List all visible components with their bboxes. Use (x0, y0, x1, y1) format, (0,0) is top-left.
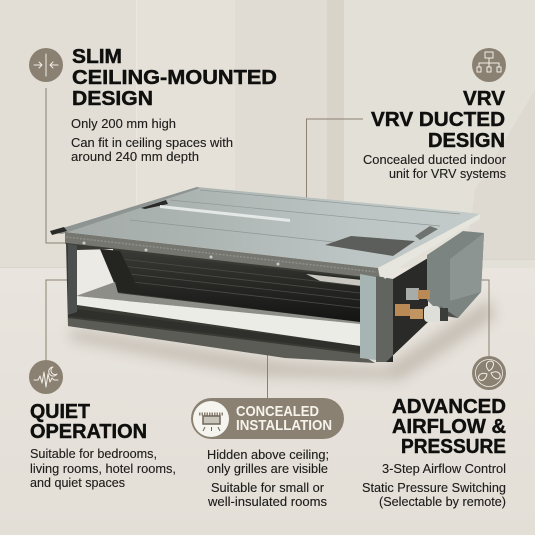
heading: VRV (463, 88, 506, 110)
text block: and quiet spaces (30, 476, 125, 490)
unit right side and corner post (360, 214, 480, 362)
heading (371, 88, 506, 152)
heading: CEILING-MOUNTED (72, 67, 277, 89)
text block: only grilles are visible (207, 462, 328, 476)
heading: ADVANCED (392, 396, 506, 418)
text block: Static Pressure Switching (362, 481, 506, 495)
panel: slim ceiling-mounted design (29, 46, 277, 164)
text block: Hidden above ceiling; (207, 448, 329, 462)
shadow under unit (70, 298, 495, 380)
text block: Suitable for small or (211, 481, 324, 495)
heading: DESIGN (428, 130, 505, 152)
text block (207, 448, 329, 509)
text block: living rooms, hotel rooms, (30, 462, 176, 476)
electrical control box (427, 231, 484, 318)
heading: PRESSURE (401, 436, 506, 458)
text block (71, 117, 233, 164)
heading: DESIGN (72, 88, 153, 110)
icon: fan (472, 356, 506, 390)
icon: compress arrows (29, 48, 63, 82)
panel: concealed installation (191, 398, 344, 509)
heading: VRV DUCTED (371, 109, 505, 131)
icon: ceiling duct (199, 414, 224, 431)
unit top panel (50, 187, 480, 268)
text block: well-insulated rooms (207, 495, 327, 509)
heading: AIRFLOW & (392, 416, 506, 438)
text block: (Selectable by remote) (379, 495, 506, 509)
panel: vrv ducted design (363, 48, 506, 181)
heading (30, 401, 147, 443)
heading: SLIM (72, 46, 122, 68)
icon: sound wave and moon (29, 360, 63, 394)
product: ducted indoor unit (50, 187, 484, 363)
icon: network hierarchy (472, 48, 506, 82)
pill badge: INSTALLATION (236, 417, 332, 434)
pill badge (191, 398, 344, 439)
text block: Only 200 mm high (71, 117, 176, 131)
heading (392, 396, 506, 458)
heading: QUIET (30, 401, 90, 423)
leader lines (46, 88, 489, 398)
unit front frame band (65, 232, 380, 279)
unit front opening and coil (66, 243, 375, 363)
panel: advanced airflow and pressure (362, 356, 506, 509)
text block (363, 153, 506, 181)
text block: Suitable for bedrooms, (30, 447, 157, 461)
pill badge: CONCEALED (236, 403, 319, 420)
text block: around 240 mm depth (71, 150, 199, 164)
text block: 3-Step Airflow Control (382, 462, 506, 476)
text block: Can fit in ceiling spaces with (71, 136, 233, 150)
text block (30, 447, 176, 490)
refrigerant pipe fittings (395, 288, 448, 322)
heading: OPERATION (30, 421, 147, 443)
text block: unit for VRV systems (389, 167, 506, 181)
heading (72, 46, 277, 110)
text block: Concealed ducted indoor (363, 153, 506, 167)
panel: quiet operation (29, 360, 176, 490)
text block (362, 462, 506, 509)
